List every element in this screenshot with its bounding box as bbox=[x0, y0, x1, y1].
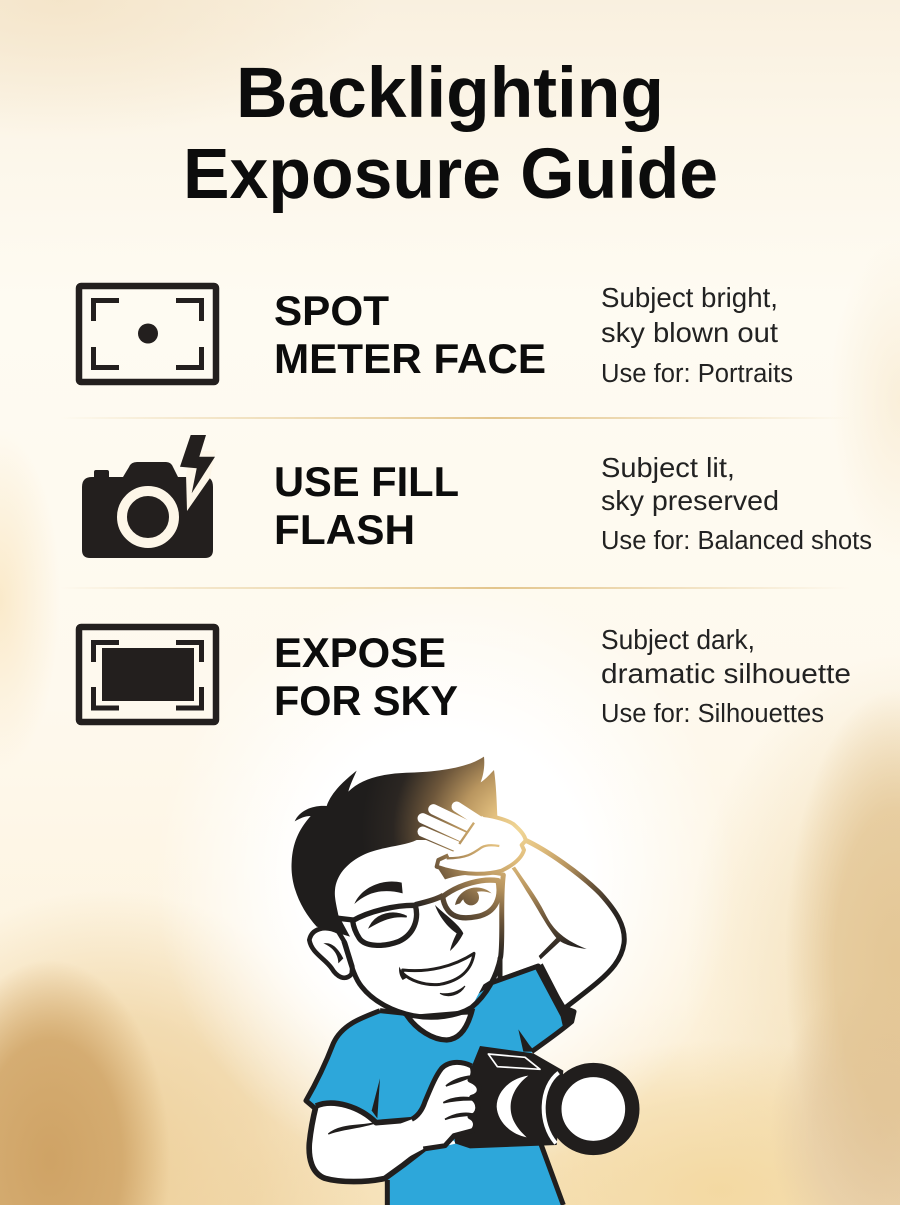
description: spot meter result: Subject bright, bbox=[601, 282, 778, 313]
description: expose for sky result: Subject dark, bbox=[601, 624, 755, 655]
description: spot meter result bbox=[601, 282, 793, 388]
icon: silhouette frame bbox=[79, 627, 216, 722]
title bbox=[183, 54, 718, 214]
illustration: photographer shading eyes bbox=[292, 757, 632, 1205]
description: spot meter result: sky blown out bbox=[601, 317, 778, 348]
description: fill flash result: Subject lit, bbox=[601, 452, 735, 483]
description: fill flash result: sky preserved bbox=[601, 485, 779, 516]
neck collar bbox=[407, 1012, 472, 1040]
row 3: expose for sky bbox=[79, 624, 851, 728]
heading: expose for sky: FOR SKY bbox=[274, 677, 458, 724]
description: fill flash result bbox=[601, 452, 872, 555]
heading: spot meter face: SPOT bbox=[274, 287, 389, 334]
jaw and face outline bbox=[344, 875, 503, 1017]
brow and wink bbox=[354, 882, 403, 904]
icon: spot metering frame bbox=[79, 286, 216, 382]
heading: spot meter face: METER FACE bbox=[274, 335, 546, 382]
description: expose for sky result bbox=[601, 624, 851, 728]
smile bbox=[403, 953, 474, 985]
torso bbox=[306, 966, 574, 1205]
inner arm crease bbox=[512, 867, 587, 959]
open eye bbox=[455, 887, 492, 905]
heading: expose for sky bbox=[274, 629, 458, 724]
glasses bbox=[338, 880, 499, 945]
nose bbox=[435, 905, 463, 951]
forearm bbox=[309, 1103, 457, 1182]
sleeve cuffs bbox=[518, 963, 575, 1052]
row 1: spot meter face bbox=[79, 282, 793, 388]
head fill bbox=[338, 842, 503, 1015]
gripping hand bbox=[397, 1062, 479, 1163]
heading: use fill flash bbox=[274, 458, 459, 553]
description: fill flash result: Use for: Balanced shots bbox=[601, 527, 872, 555]
row 2: use fill flash bbox=[82, 435, 872, 558]
heading: spot meter face bbox=[274, 287, 546, 382]
title: Exposure Guide bbox=[183, 135, 718, 214]
ear bbox=[309, 928, 353, 978]
description: expose for sky result: dramatic silhouette bbox=[601, 658, 851, 689]
raised arm bbox=[500, 830, 624, 1009]
description: spot meter result: Use for: Portraits bbox=[601, 360, 793, 388]
heading: expose for sky: EXPOSE bbox=[274, 629, 446, 676]
camera body bbox=[450, 1046, 632, 1148]
lens ring bbox=[554, 1070, 632, 1148]
description: expose for sky result: Use for: Silhouettes bbox=[601, 700, 824, 728]
hand on forehead bbox=[423, 807, 526, 879]
hair bbox=[292, 757, 497, 937]
icon: camera with flash bbox=[82, 435, 216, 558]
heading: use fill flash: FLASH bbox=[274, 506, 415, 553]
title: Backlighting bbox=[236, 54, 664, 133]
heading: use fill flash: USE FILL bbox=[274, 458, 459, 505]
